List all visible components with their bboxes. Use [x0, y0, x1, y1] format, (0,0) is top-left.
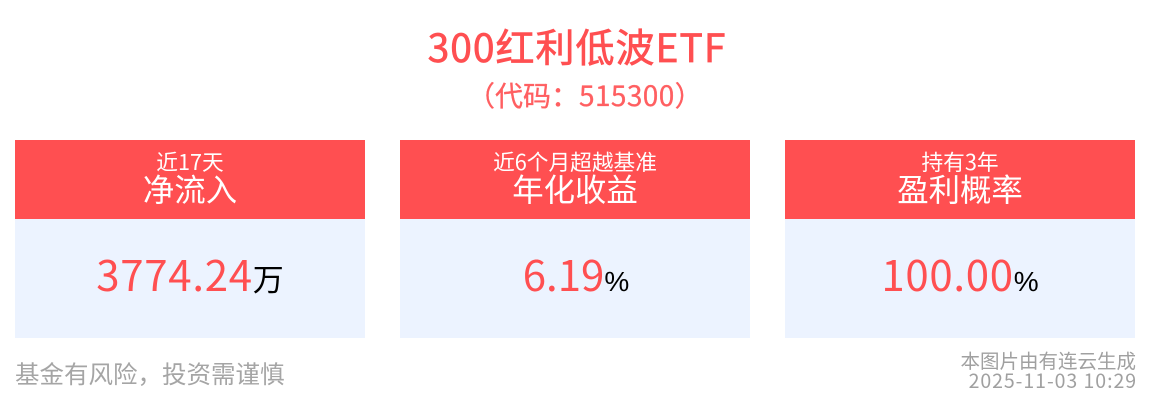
value: annualized return: 6.19% — [523, 243, 629, 304]
panel header: annualized return — [400, 140, 750, 219]
title: 300红利低波ETF — [428, 18, 726, 74]
panel header: annualized return: 近6个月超越基准 — [493, 146, 657, 177]
panel header: profit probability — [785, 140, 1135, 219]
panel: annualized return — [400, 140, 750, 338]
value: profit probability: 100.00% — [881, 243, 1039, 304]
panel header: profit probability: 持有3年 — [921, 146, 999, 177]
value: net inflow: 3774.24万 — [96, 243, 284, 304]
panel header: annualized return: 年化收益 — [512, 166, 638, 211]
subtitle: fund code: （代码：515300） — [467, 75, 703, 115]
panel header: net inflow — [15, 140, 365, 219]
generation credit and timestamp: 本图片由有连云生成 — [960, 345, 1136, 374]
generation credit and timestamp: 2025-11-03 10:29 — [969, 365, 1137, 394]
risk disclaimer: 基金有风险，投资需谨慎 — [15, 356, 284, 391]
generation credit and timestamp — [960, 345, 1137, 394]
panel: profit probability — [785, 140, 1135, 338]
panel: net inflow — [15, 140, 365, 338]
panel header: net inflow: 净流入 — [143, 166, 237, 211]
panel header: net inflow: 近17天 — [156, 146, 224, 177]
panel header: profit probability: 盈利概率 — [897, 166, 1023, 211]
